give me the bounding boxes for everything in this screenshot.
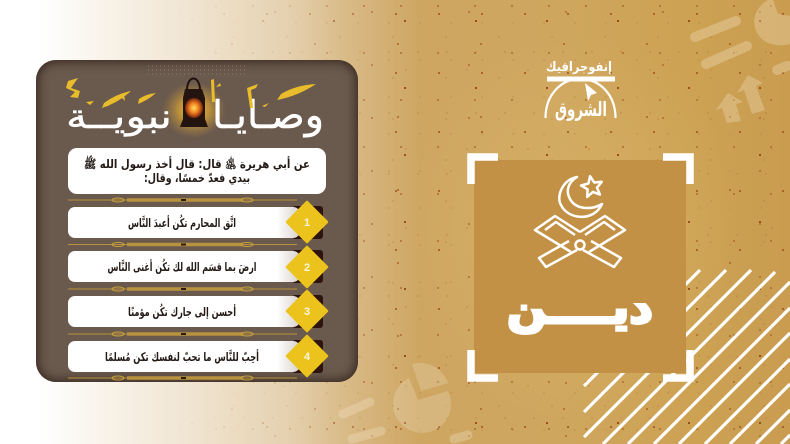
logo caption: إنفوجرافيك: [546, 60, 612, 75]
logo name: الشروق: [555, 97, 607, 121]
title: wasaya nabawiya: [66, 78, 324, 138]
item 1: [68, 202, 327, 242]
brand logo: [546, 60, 616, 121]
intro text: عن أبي هريرة ﵁ قال: قال أخذ رسول الله ﷺ: [84, 154, 310, 172]
dividers: [68, 198, 297, 202]
title text: وصـايـا: [212, 93, 324, 138]
item 2: 2: [304, 262, 310, 274]
logo arc and bar: [546, 79, 616, 118]
book: [535, 216, 625, 252]
title: wasaya nabawiya: نبويــة: [66, 97, 172, 137]
category label: ديــــن: [507, 283, 653, 334]
item 4: 4: [304, 351, 311, 363]
lantern glow: [162, 82, 226, 138]
category square: [474, 160, 686, 373]
icon: crescent, star and open book: [535, 176, 625, 267]
intro quote box: بيدي فعدّ خمسًا، وقال:: [144, 171, 250, 186]
corner brackets: [471, 157, 690, 378]
icon: lantern: [180, 78, 208, 127]
logo cursor: [585, 83, 597, 101]
item 4: أحِبّ للنَّاس ما تحبّ لنفسك تكن مُسلمًا: [105, 349, 259, 364]
diagonal stripes: [584, 270, 790, 444]
item 1: اتَّق المحارم تكُن أعبدَ النَّاس: [128, 214, 236, 231]
item 3: أحسن إلى جارك تكُن مؤمنًا: [128, 303, 236, 320]
item 2: [68, 247, 327, 287]
intro quote box: [68, 148, 326, 194]
ghost icons: bottom: [343, 363, 468, 439]
item 3: 3: [304, 306, 310, 318]
star: [581, 176, 602, 197]
gold swashes: [66, 78, 316, 108]
item 2: ارضَ بما قسَم الله لك تكُن أغنى النَّاس: [108, 258, 256, 274]
crescent: [559, 177, 602, 217]
item 1: 1: [304, 217, 310, 229]
ghost icons: top right: [695, 0, 790, 123]
item 3: [68, 291, 327, 331]
dotted top ornament: [148, 66, 246, 74]
item 4: [68, 336, 327, 376]
background speckle texture: [191, 5, 784, 437]
panel: prophetic advice: [36, 60, 358, 382]
